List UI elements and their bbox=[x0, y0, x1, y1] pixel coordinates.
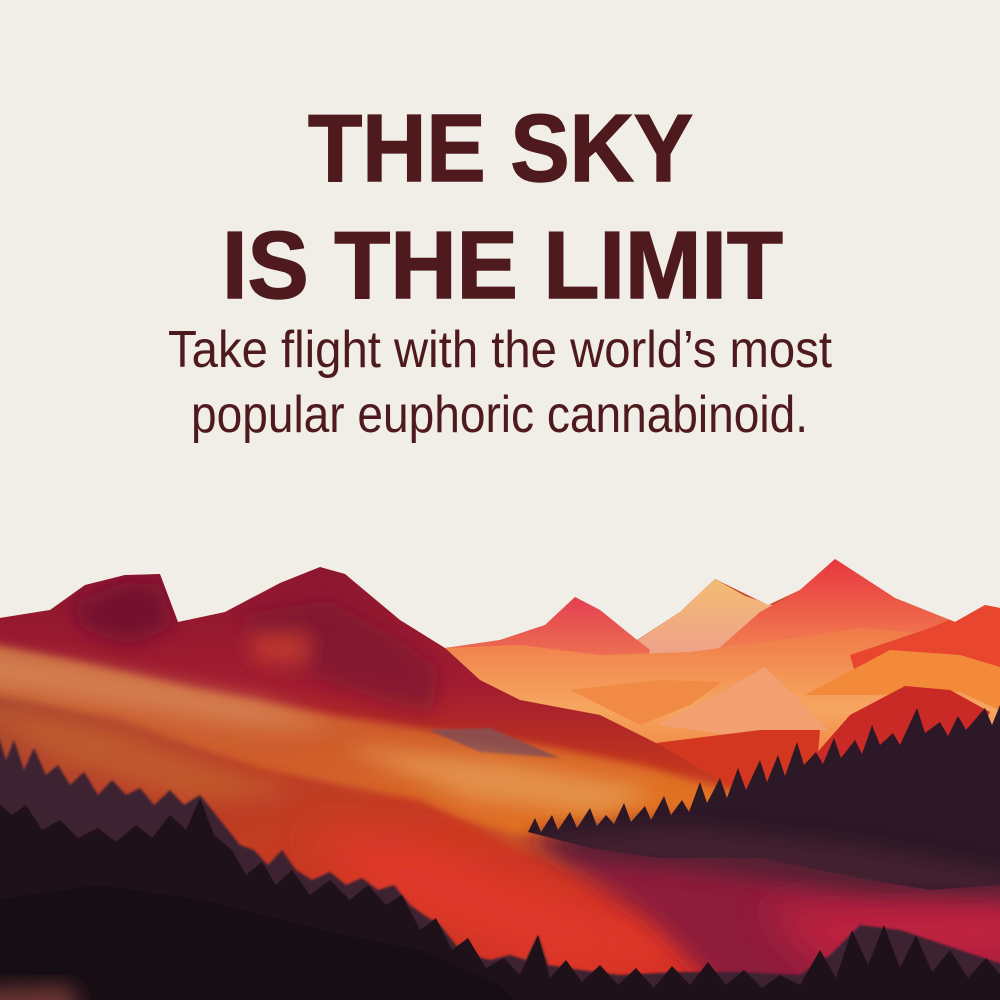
watercolor mountain landscape bbox=[0, 550, 1000, 1000]
title: THE SKY bbox=[308, 95, 693, 202]
central maroon mountains bbox=[0, 567, 730, 790]
title: IS THE LIMIT bbox=[222, 212, 783, 319]
shadow patches bbox=[70, 582, 440, 715]
right misty valley bbox=[530, 825, 1000, 1000]
subtitle: Take flight with the world’s most bbox=[168, 321, 833, 379]
far right orange mountains bbox=[445, 559, 1000, 790]
dark left forest bbox=[0, 725, 1000, 1000]
subtitle bbox=[168, 321, 833, 444]
title bbox=[222, 95, 783, 319]
dark right forest bbox=[528, 705, 1000, 900]
long orange slopes bbox=[0, 640, 745, 835]
subtitle: popular euphoric cannabinoid. bbox=[191, 386, 808, 444]
